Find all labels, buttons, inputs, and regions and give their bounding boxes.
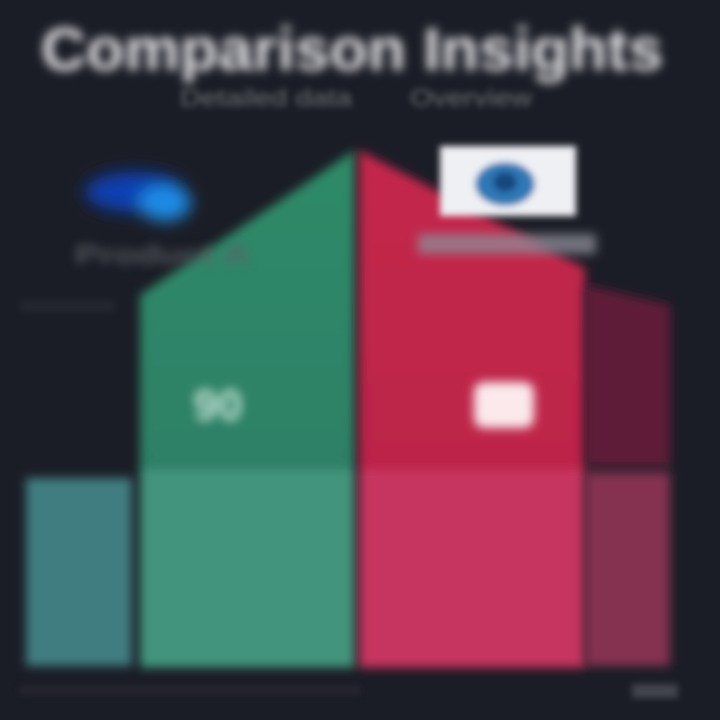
lower green band: [140, 470, 355, 666]
icon: white logo card: [440, 146, 576, 216]
subtitle: Detailed data: [180, 85, 353, 112]
red score: [474, 382, 534, 428]
right brand label: [418, 234, 596, 254]
row label text: [20, 300, 115, 312]
footer text: [20, 684, 678, 698]
title: Comparison Insights: [41, 16, 663, 83]
green score: 90: [194, 381, 242, 430]
icon: blue logo: [85, 172, 191, 221]
left brand label: Product A: [75, 239, 250, 270]
lower dark red band: [585, 472, 670, 666]
lower red band: [359, 470, 585, 666]
panel: green column: [140, 150, 355, 668]
subtitle: Overview: [410, 85, 533, 112]
panel: red column: [359, 150, 585, 668]
panel: teal row labels: [26, 478, 132, 666]
subtitle: [180, 85, 533, 112]
panel: dark red column: [585, 285, 670, 666]
